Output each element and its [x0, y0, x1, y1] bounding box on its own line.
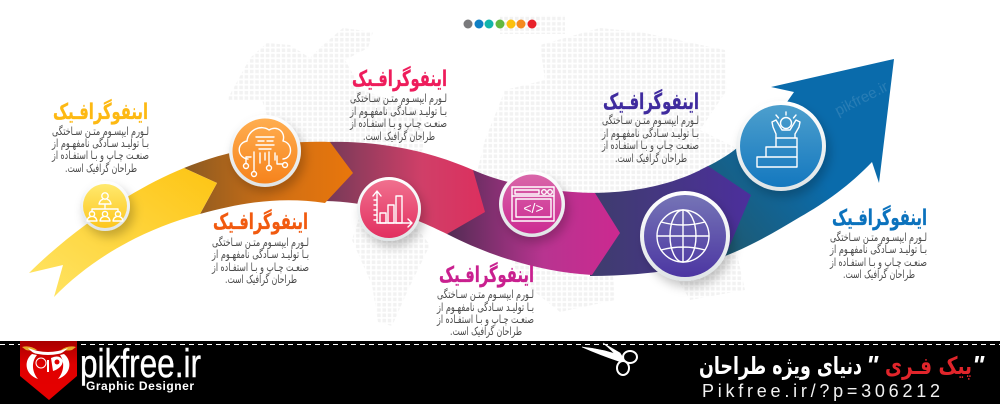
- ribbon arrow: blue head: [700, 59, 894, 260]
- text block: magenta: [436, 261, 534, 339]
- text block: magenta: اینفوگرافـیک: [439, 261, 534, 288]
- icon: organisation chart: [80, 181, 130, 231]
- icon: bar chart: [357, 177, 421, 241]
- text block: blue: طراحان گرافیک است.: [843, 267, 915, 282]
- icon: globe: [640, 191, 730, 281]
- text block: blue: بـا تولیـد سـادگی نامفهـوم از: [829, 242, 927, 257]
- ribbon: magenta segment: [447, 170, 620, 275]
- text block: yellow: بـا تولیـد سـادگی نامفهـوم از: [51, 136, 149, 151]
- ribbon: yellow tail: [29, 168, 217, 297]
- text block: magenta: طراحان گرافیک است.: [450, 324, 522, 339]
- icon: code window: [499, 171, 565, 237]
- persian slogan: ": [972, 350, 985, 380]
- text block: orange: طراحان گرافیک است.: [225, 272, 297, 287]
- text block: yellow: اینفوگرافـیک: [53, 98, 148, 125]
- text block: crimson: [349, 65, 447, 144]
- watermark on blue arrow: pikfree.ir: [832, 78, 891, 120]
- text block: purple: صنعـت چـاپ و بـا استفـاده از: [601, 138, 699, 153]
- icon: code window: </>: [523, 200, 544, 216]
- text block: yellow: [51, 98, 149, 176]
- text block: blue: صنعـت چـاپ و بـا استفـاده از: [829, 255, 927, 270]
- text block: crimson: بـا تولیـد سـادگی نامفهـوم از: [349, 104, 447, 119]
- ribbon: purple segment: [590, 166, 751, 276]
- icon: cloud circuit: [229, 115, 301, 187]
- ribbon: orange segment: [184, 142, 353, 214]
- logo shield: [20, 341, 77, 400]
- text block: magenta: بـا تولیـد سـادگی نامفهـوم از: [436, 300, 534, 315]
- text block: blue: اینفوگرافـیک: [832, 204, 927, 231]
- icon: person on stairs: [736, 101, 826, 191]
- icon: scissors: [582, 343, 637, 375]
- text block: yellow: لـورم ایپسـوم متـن سـاختگی: [52, 124, 149, 139]
- persian slogan: ": [866, 350, 879, 380]
- text block: crimson: صنعـت چـاپ و بـا استفـاده از: [349, 116, 447, 131]
- text block: magenta: لـورم ایپسـوم متـن سـاختگی: [437, 287, 534, 302]
- text block: purple: لـورم ایپسـوم متـن سـاختگی: [602, 113, 699, 128]
- dotted world map: [227, 15, 760, 326]
- text block: purple: [601, 88, 699, 166]
- text block: purple: بـا تولیـد سـادگی نامفهـوم از: [601, 126, 699, 141]
- text block: purple: طراحان گرافیک است.: [615, 151, 687, 166]
- footer banner: [0, 341, 1000, 404]
- text block: magenta: صنعـت چـاپ و بـا استفـاده از: [436, 312, 534, 327]
- persian slogan: پیک فـری: [885, 352, 972, 380]
- header colour dots: [464, 20, 536, 28]
- text block: blue: [829, 204, 927, 282]
- text block: orange: صنعـت چـاپ و بـا استفـاده از: [211, 260, 309, 275]
- text block: orange: بـا تولیـد سـادگی نامفهـوم از: [211, 247, 309, 262]
- text block: crimson: طراحان گرافیک است.: [363, 129, 435, 144]
- text block: blue: لـورم ایپسـوم متـن سـاختگی: [830, 230, 927, 245]
- brand name: pikfree.ir: [80, 342, 201, 386]
- text block: crimson: لـورم ایپسـوم متـن سـاختگی: [350, 91, 447, 106]
- text block: yellow: صنعـت چـاپ و بـا استفـاده از: [51, 148, 149, 163]
- text block: orange: [211, 208, 309, 287]
- text block: purple: اینفوگرافـیک: [603, 88, 699, 115]
- text block: orange: اینفوگرافـیک: [213, 208, 308, 235]
- ribbon: crimson segment: [325, 142, 485, 234]
- tagline: Graphic Designer: [86, 379, 194, 393]
- text block: crimson: اینفوگرافـیک: [352, 65, 447, 92]
- text block: yellow: طراحان گرافیک است.: [65, 161, 137, 176]
- post url: Pikfree.ir/?p=306212: [702, 381, 940, 401]
- text block: orange: لـورم ایپسـوم متـن سـاختگی: [212, 235, 309, 250]
- persian slogan: دنیای ویژه طراحان: [699, 352, 862, 380]
